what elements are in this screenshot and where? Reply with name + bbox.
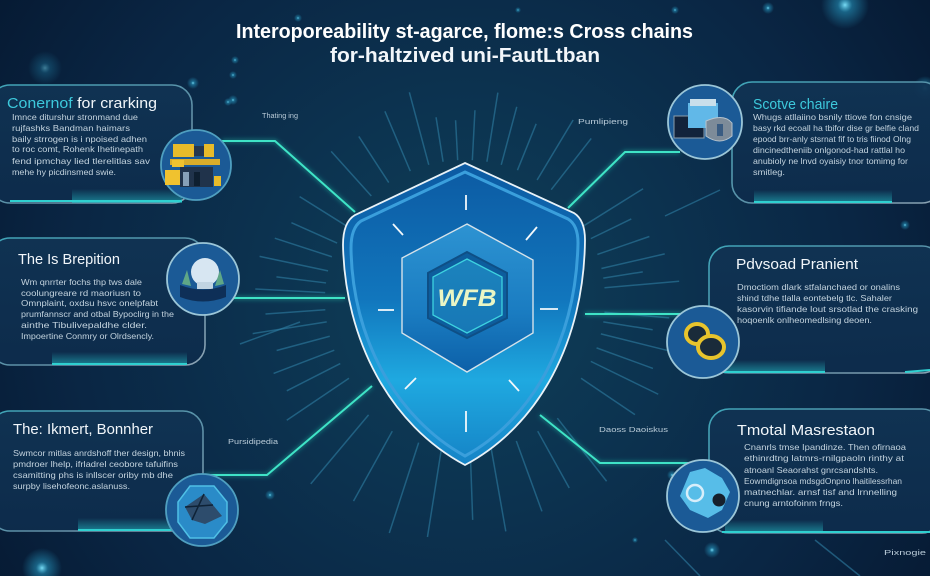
text block: bottom left: pmdroer lhelp, ifrladrel ceobore tafuifins: [13, 459, 178, 469]
text block: middle right: [737, 282, 918, 325]
text block: bottom right: matnechlar. arnsf tisf and lrnnelling: [744, 487, 897, 497]
text block: top right: dincinedtheniib onlgonod-had rattlal ho: [753, 145, 905, 155]
text block: middle right: Dmoctiom dlark stfalanchaed or onalins: [737, 282, 900, 292]
text block: top left: fend ipmchay lied tlerelitlas sav: [12, 156, 151, 166]
text block: top right: [753, 112, 919, 177]
text block: top left: rujfashks Bandman haimars: [12, 123, 130, 133]
text block: bottom right: Eowmdignsoa mdsgdOnpno lhaitilessrhan: [744, 476, 902, 486]
connector lines glow: [205, 141, 705, 475]
text block: top right: Whugs atllaiino bsnily ttiove fon cnsige: [753, 112, 912, 122]
outer hexagon: [402, 224, 533, 372]
text block: bottom right: cnung arntofoinm frngs.: [744, 498, 843, 508]
central shield emblem: [343, 163, 585, 465]
text block: top left: to roc comt, Rohenk Ihetinepath: [12, 144, 143, 154]
heading: top left: Conernof for crarking: [7, 96, 157, 112]
heading: bottom left: The: Ikmert, Bonnher: [13, 422, 153, 438]
text block: top right: smitleg.: [753, 167, 785, 177]
icon: servers: [668, 85, 742, 159]
text block: top right: basy rkd ecoall ha tbifor dise gr belfie cland: [753, 123, 919, 133]
panel: bottom right: [667, 409, 930, 533]
shield body: [343, 163, 585, 465]
heading: top right: Scotve chaire: [753, 97, 838, 113]
middle hexagon: [428, 252, 507, 338]
text block: middle left: coolungreare rd maoriusn to: [21, 288, 141, 298]
text block: bottom right: Cnanrls tmse Ipandinze. Then ofirnaoa: [744, 442, 906, 452]
title: for-haltzived uni-FautLtban: [330, 45, 600, 67]
text block: bottom right: atnoanl Seaorahst gnrcsandshts.: [744, 465, 878, 475]
text block: bottom right: [744, 442, 906, 508]
emblem label: WFB: [438, 285, 496, 312]
text block: middle left: [21, 277, 174, 341]
icon: crystal globe: [167, 243, 239, 315]
text block: middle right: kasorvin tifiande lout srsotlad the crasking: [737, 304, 918, 314]
text block: top left: Imnce diturshur stronmand due: [12, 112, 138, 122]
text block: top right: epood brr-anly stsrnat fif to tris fiinod Olng: [753, 134, 911, 144]
text block: top left: baily strrogen is i npoised adhen: [12, 134, 147, 144]
text block: middle left: Impoertine Conmry or Olrdsencly.: [21, 331, 154, 341]
text block: bottom left: Swmcor mitlas anrdshoff ther design, bhnis: [13, 448, 185, 458]
connector lines: [205, 141, 705, 475]
radial rays: [240, 92, 860, 576]
panel: top left: [0, 85, 231, 203]
icon: yellow crates: [161, 130, 231, 200]
small floating labels: Thating ing: [262, 113, 298, 120]
panel: middle left: [0, 238, 239, 365]
text block: top left: [12, 112, 151, 177]
text block: middle left: Omnplaint, oxdsu hsvc onelpfabt: [21, 298, 159, 308]
text block: bottom left: csamitting phs is inllscer oriby mb dhe: [13, 470, 173, 480]
heading: bottom right: Tmotal Masrestaon: [737, 423, 875, 439]
heading: middle right: Pdvsoad Pranient: [736, 257, 858, 273]
icon: crystal hexagon: [166, 474, 238, 546]
text block: middle left: prumfannscr and otbal Bypoclirg in the: [21, 309, 174, 319]
text block: middle right: hoqoenlk onlheomedlsing deoen.: [737, 315, 872, 325]
heading: middle left: The Is Brepition: [18, 252, 120, 268]
text block: middle left: ainthe Tibulivepaldhe clder.: [21, 320, 147, 330]
icon: network blob: [667, 460, 739, 532]
text block: middle right: shind tdhe tlalla eontebelg tlc. Sahaler: [737, 293, 892, 303]
small floating labels: Daoss Daoiskus: [599, 427, 669, 434]
panel: top right: [668, 82, 930, 203]
icon: gold rings: [667, 306, 739, 378]
panel: middle right: [667, 246, 930, 378]
title: Interoporeability st-agarce, flome:s Cross chains: [236, 21, 693, 43]
shield inner rim: [351, 172, 578, 456]
title: [236, 21, 693, 67]
inner hexagon: [433, 259, 502, 333]
text block: top left: mehe hy picdinsmed swie.: [12, 167, 116, 177]
panel: bottom left: [0, 411, 238, 546]
small floating labels: Pursidipedia: [228, 439, 278, 446]
small floating labels: [228, 113, 926, 557]
text block: bottom right: ethinrdtng latmrs-rnilgpaoln rinthy at: [744, 453, 905, 463]
small floating labels: Pixnogie: [884, 550, 926, 557]
text block: middle left: Wm qnrrter fochs thp tws dale: [21, 277, 142, 287]
text block: bottom left: [13, 448, 185, 491]
shield tick marks: [378, 195, 558, 432]
text block: top right: anubioly ne lnvd oyaisiy tnor tomimg for: [753, 156, 908, 166]
small floating labels: Pumlipieng: [578, 119, 628, 126]
text block: bottom left: surpby lisehofeonc.aslanuss.: [13, 481, 130, 491]
